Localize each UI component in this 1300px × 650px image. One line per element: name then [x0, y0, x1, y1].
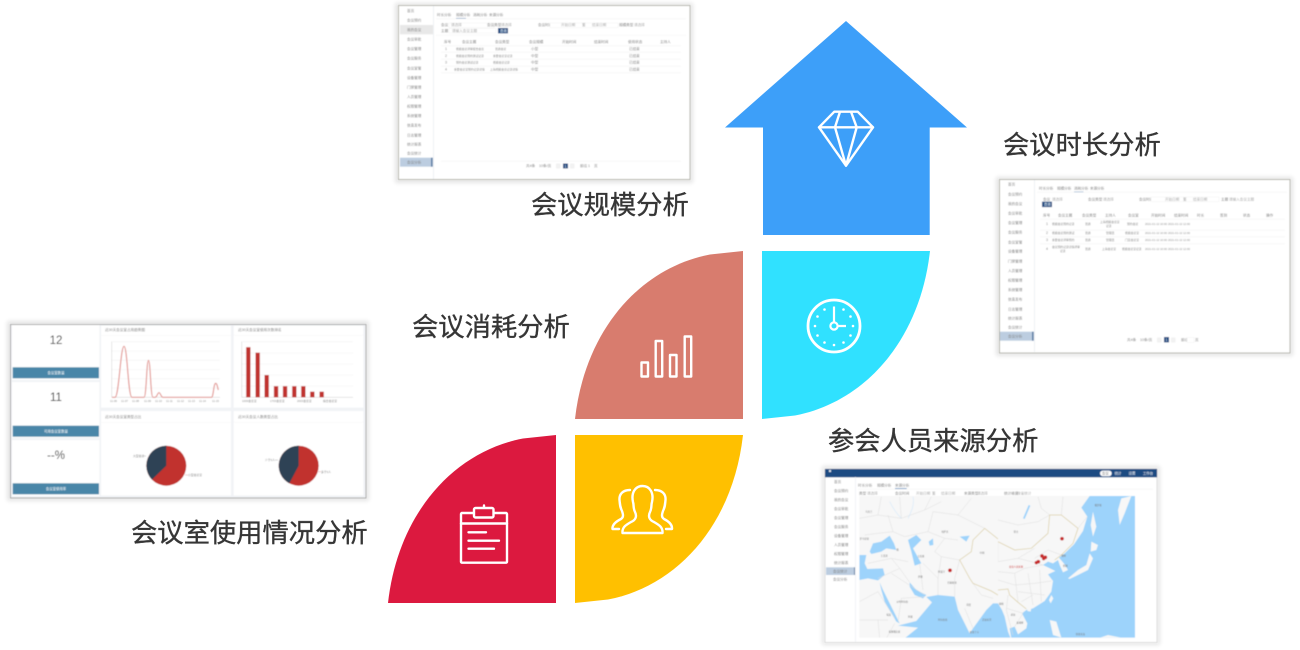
- sea areas west: [859, 535, 998, 638]
- data table: 中型: [531, 60, 539, 64]
- bar chart card: 综合会议室: [323, 399, 337, 403]
- tabs and filter: 按省统计: [1017, 491, 1032, 496]
- data table: 2021-01-12 12:00: [1168, 238, 1191, 242]
- filter bar: 会议类型: [487, 22, 502, 27]
- filter bar: 请输入会议主题: [452, 28, 478, 33]
- borders west: [877, 508, 959, 622]
- petal: consumption analysis: [575, 251, 743, 419]
- line chart card: 11-10: [155, 399, 162, 403]
- sidebar: 会议审批: [407, 36, 422, 41]
- data table: 序号: [1043, 212, 1051, 217]
- sidebar: 首页: [407, 8, 415, 13]
- islands east: [1027, 496, 1131, 638]
- bar chart card: 近30天会议室使用次数排名: [238, 327, 282, 332]
- bar chart card: 2003会议室: [297, 399, 312, 403]
- sidebar: 日志管理: [407, 132, 422, 137]
- icon: clock: [808, 300, 860, 352]
- data table: 2: [445, 54, 447, 58]
- tabs and filter: 开始日期: [916, 491, 931, 496]
- labels east: 俄罗斯: [1095, 503, 1102, 507]
- petal: attendee source analysis: [575, 435, 743, 603]
- pie chart card: attendee type: 少于5人: [265, 458, 275, 462]
- sidebar: 会议分析: [833, 576, 848, 581]
- sidebar: 会议预约: [407, 17, 422, 22]
- data table: 普通: [1085, 222, 1091, 226]
- data table: 视频会议预约记录: [1052, 222, 1075, 226]
- data table: 会议主题: [1058, 212, 1073, 217]
- sidebar: 我的会议: [834, 497, 849, 502]
- line chart card: 11-14: [199, 399, 206, 403]
- data table: 预约会议: [1127, 222, 1138, 226]
- stat card: used rooms: 11: [50, 392, 62, 404]
- tabs and filter: 统计维度: [1004, 491, 1019, 496]
- data table: 视频会议室: [1125, 231, 1139, 235]
- pagination: [441, 161, 681, 168]
- icon: bar chart: [642, 336, 691, 376]
- sidebar: 会议管理: [834, 515, 849, 520]
- tabs: 消耗分析: [1074, 185, 1089, 190]
- data table: 已结束: [629, 66, 640, 71]
- data table: 重要会议室预约记录详情: [454, 67, 485, 71]
- data table: 管理员: [1106, 238, 1115, 242]
- sidebar: 权限管理: [1008, 278, 1023, 283]
- data table: 序号: [444, 39, 452, 44]
- data table: 会议室: [1128, 212, 1139, 217]
- bar chart card: 1009会议室: [242, 399, 257, 403]
- sidebar: 统计报表: [407, 142, 422, 147]
- labels west: 土库曼: [917, 554, 925, 558]
- labels west: 伊朗: [918, 574, 923, 578]
- labels east: 朝鲜: [1061, 553, 1067, 557]
- tabs: 来源分析: [1090, 185, 1105, 190]
- sidebar: 会议统计: [833, 569, 848, 574]
- sea areas east: [998, 496, 1135, 638]
- stat card: usage rate: [12, 440, 100, 496]
- data table: 已结束: [629, 60, 640, 64]
- sidebar: 首页: [1008, 182, 1016, 187]
- tabs and filter: 会议时间: [895, 491, 910, 496]
- data table: 3: [445, 60, 447, 64]
- map: east half: [998, 495, 1135, 640]
- pagination: 页: [1195, 337, 1199, 342]
- data table: 视频会议预约测试: [1052, 231, 1075, 235]
- top navigation bar: 设置: [1129, 471, 1136, 476]
- sidebar: 设备管理: [407, 75, 422, 80]
- pagination: 前往: [580, 163, 588, 168]
- sidebar: 日志管理: [1008, 306, 1023, 311]
- pagination: 1: [1166, 338, 1168, 342]
- tabs and filter: 时长分析: [858, 482, 873, 488]
- data table: 视频会议记录: [493, 60, 510, 64]
- stat card: used rooms: [12, 382, 100, 438]
- line chart card: 11-06: [110, 399, 117, 403]
- data table: 上海会议室: [1102, 247, 1116, 251]
- sidebar: 首页: [834, 479, 842, 484]
- labels west: 斯里兰卡: [970, 630, 980, 634]
- filter bar: 请选择: [451, 22, 462, 27]
- sidebar: 会议服务: [407, 56, 422, 61]
- data table: 视频会议室记录: [1122, 247, 1142, 251]
- filter bar: 结束日期: [1193, 196, 1208, 201]
- sidebar: 权限管理: [407, 104, 422, 109]
- labels east: 老挝: [1011, 613, 1016, 617]
- filter bar: 查询: [500, 28, 507, 33]
- sidebar: 会议分析: [1008, 333, 1023, 338]
- sidebar: 人员管理: [407, 94, 422, 99]
- top navigation bar: 会议: [1102, 471, 1109, 476]
- filter bar: [1042, 196, 1255, 207]
- marker: Afghanistan: [948, 568, 952, 572]
- line chart card: 11-13: [188, 399, 195, 403]
- filter bar: 请选择: [1103, 196, 1114, 201]
- labels west: 土耳其: [881, 554, 888, 558]
- red data markers: [1035, 537, 1064, 564]
- sidebar: 会议预约: [834, 488, 849, 493]
- sidebar: 会议管理: [1008, 220, 1023, 225]
- labels west: 印度: [966, 603, 972, 607]
- arrow: blue up arrow: [725, 21, 967, 235]
- data table: 已结束: [629, 53, 640, 58]
- line chart card: 11-08: [132, 399, 139, 403]
- data table: 使用状态: [628, 39, 643, 44]
- data table: 4: [445, 67, 447, 71]
- tabs and filter: [858, 482, 1153, 496]
- heading: meeting duration analysis: 会议时长分析: [1003, 130, 1161, 160]
- tabs: 时长分析: [1039, 185, 1054, 190]
- data table: 时长: [1197, 212, 1205, 217]
- heading: attendee source analysis: 参会人员来源分析: [828, 426, 1038, 456]
- labels west: 沙特阿拉伯: [896, 599, 909, 603]
- data table: 2021-01-12 12:00: [1168, 222, 1191, 226]
- sidebar: 门禁管理: [1008, 258, 1023, 263]
- panel: meeting scale screenshot: [395, 3, 693, 183]
- pagination: 共4条: [526, 163, 536, 168]
- bar chart card: [234, 326, 363, 408]
- filter bar: 开始日期: [561, 22, 576, 27]
- stat card: used rooms: 可用会议室数量: [44, 428, 68, 434]
- labels east: 蒙古: [1014, 529, 1019, 533]
- labels west: 中国: [980, 550, 985, 554]
- pagination: [1127, 337, 1199, 342]
- top navigation bar: 统计: [1115, 471, 1122, 476]
- data table: 会议类型: [1082, 212, 1097, 217]
- data table: 签到: [1220, 212, 1228, 217]
- sidebar: 会议统计: [1008, 325, 1023, 330]
- data table: 会议类型: [495, 39, 510, 44]
- data table: 状态: [1243, 212, 1251, 217]
- panel: room usage dashboard screenshot: [7, 321, 369, 501]
- petal: duration analysis: [762, 251, 930, 419]
- sidebar: 会议服务: [1008, 230, 1023, 235]
- sidebar: 会议审批: [834, 506, 849, 511]
- data table: 门禁会议室: [1125, 238, 1139, 242]
- panel: attendee source map screenshot: [822, 466, 1160, 645]
- filter bar: 请选择: [1052, 196, 1063, 201]
- data table: 上海视频会议记录详情: [490, 67, 518, 71]
- line chart card: 近30天会议室占用趋势图: [105, 327, 145, 332]
- sidebar: 门禁管理: [407, 84, 422, 89]
- sidebar: [400, 6, 434, 179]
- pagination: 前往: [1181, 337, 1189, 342]
- labels west: [860, 510, 992, 634]
- sidebar: [826, 477, 856, 642]
- labels east: 菲律宾海: [1076, 632, 1086, 636]
- tabs and filter: 请选择: [867, 491, 878, 496]
- tabs: [436, 12, 686, 19]
- data table: 小型: [531, 46, 539, 51]
- top navigation bar: [825, 469, 1157, 477]
- map: west half: [858, 495, 998, 640]
- pagination: 1: [588, 164, 590, 168]
- data table: 2021-01-12 10:00: [1145, 238, 1168, 242]
- sidebar: 信息发布: [407, 123, 422, 128]
- filter bar: 主题: [441, 28, 449, 33]
- tabs and filter: 类型: [859, 491, 867, 496]
- stat card: total rooms: [12, 325, 100, 380]
- data table: 视频会议预约测试记录: [456, 54, 484, 58]
- labels west: 埃塞俄比亚: [889, 630, 901, 634]
- line chart card: 11-11: [166, 399, 173, 403]
- labels west: 乌克兰: [865, 510, 873, 514]
- data table: [441, 39, 681, 73]
- data table: 2021-01-12 12:00: [1168, 231, 1191, 235]
- sidebar: 会议分析: [407, 159, 422, 164]
- labels east: [999, 503, 1102, 636]
- data table: 2: [1046, 231, 1048, 235]
- icon: diamond: [819, 112, 873, 166]
- stat card: total rooms: 会议室数量: [48, 370, 65, 375]
- labels west: 俄: [896, 547, 899, 551]
- tabs and filter: 结束日期: [941, 491, 956, 496]
- pie chart card: meeting type: 近30天会议室类型占比: [105, 414, 142, 419]
- data table: 结束时间: [594, 39, 609, 44]
- sidebar: 设备管理: [1008, 249, 1023, 254]
- filter bar: 开始日期: [1165, 196, 1180, 201]
- sidebar: 统计报表: [1008, 315, 1023, 320]
- top navigation bar: 工作台: [1143, 471, 1154, 476]
- data table: 预约会议测试记录: [456, 60, 479, 64]
- sidebar: 设备管理: [834, 533, 849, 538]
- pagination: 10条/页: [539, 163, 552, 168]
- pie chart card: meeting type: [101, 411, 231, 496]
- data table: 中型: [531, 53, 539, 58]
- pagination: 共4条: [1127, 337, 1137, 342]
- data table: 1: [445, 47, 447, 51]
- data table: 主持人: [1105, 212, 1116, 217]
- tabs: 规模分析: [456, 12, 471, 17]
- data table: 记录: [1060, 249, 1066, 253]
- sidebar: 人员管理: [1008, 268, 1023, 273]
- stat card: usage rate: --%: [47, 450, 65, 462]
- sidebar: 会议室管: [407, 65, 422, 70]
- labels west: 阿拉伯海: [938, 617, 948, 621]
- pie chart card: attendee type: 多于5人: [321, 470, 331, 474]
- pie chart card: meeting type: 大型会议: [133, 454, 144, 458]
- labels east: 韩国: [1063, 564, 1068, 568]
- filter bar: 会议: [1043, 196, 1051, 201]
- data table: 结束时间: [1174, 212, 1189, 217]
- data table: [1040, 212, 1285, 253]
- tabs: 规模分析: [1057, 185, 1072, 190]
- sidebar: 会议审批: [1008, 211, 1023, 216]
- labels east: 柬埔寨: [1016, 620, 1024, 624]
- data table: 2021-01-12 10:00: [1145, 247, 1168, 251]
- tabs: 消耗分析: [473, 12, 488, 17]
- labels west: 阿富汗: [938, 569, 946, 573]
- data table: 开始时间: [562, 39, 577, 44]
- borders east: [1006, 558, 1042, 635]
- labels west: 巴基斯坦: [947, 580, 957, 584]
- sidebar: 系统管理: [1008, 287, 1023, 292]
- data table: 2021-01-12 12:00: [1168, 247, 1191, 251]
- data table: 记录: [1106, 224, 1112, 228]
- tabs: [1037, 185, 1287, 192]
- pie chart card: attendee type: [234, 411, 363, 496]
- line chart card: [101, 326, 231, 408]
- petal: room usage analysis: [388, 435, 556, 603]
- labels west: 罗马尼亚: [860, 536, 870, 540]
- data table: 已结束: [629, 46, 640, 51]
- tabs and filter: 至: [932, 492, 936, 496]
- line chart card: 11-15: [212, 399, 219, 403]
- China border east: [998, 515, 1078, 609]
- map data label: 会议人员来源: [1009, 565, 1024, 569]
- bar chart card: 1703会议室: [270, 399, 285, 403]
- filter bar: 请选择: [634, 22, 645, 27]
- pagination: 页: [594, 163, 598, 168]
- filter bar: 主题: [1221, 196, 1229, 201]
- tabs and filter: 来源类型: [964, 491, 979, 496]
- line chart card: 11-09: [144, 399, 151, 403]
- data table: 2021-01-12 10:00: [1145, 222, 1168, 226]
- filter bar: 请输入会议主题: [1229, 196, 1255, 201]
- sidebar: 会议室管: [1008, 239, 1023, 244]
- filter bar: 至: [1183, 197, 1187, 201]
- rivers: [890, 497, 913, 518]
- data table: 1: [1046, 222, 1048, 226]
- labels west: 阿曼: [908, 615, 913, 619]
- data table: 中型: [531, 66, 539, 71]
- filter bar: 会议: [441, 22, 449, 27]
- data table: 主持人: [660, 39, 671, 44]
- tabs and filter: 来源分析: [895, 482, 910, 488]
- filter bar: 规模类型: [619, 22, 634, 27]
- data table: 会议预约记录详情评审: [1052, 245, 1080, 249]
- data table: 重要会议室记录: [493, 54, 513, 58]
- sidebar: 会议统计: [407, 151, 422, 156]
- tabs: 来源分析: [489, 12, 504, 17]
- icon: people: [612, 486, 672, 533]
- tabs and filter: 规模分析: [877, 482, 892, 488]
- stat card: total rooms: 12: [50, 335, 62, 347]
- heading: meeting scale analysis: 会议规模分析: [531, 190, 689, 220]
- sidebar: 我的会议: [1008, 201, 1023, 206]
- pie chart card: meeting type: 小型会议室: [188, 473, 202, 477]
- China border west: [960, 528, 998, 595]
- data table: 管理员: [1106, 231, 1115, 235]
- filter bar: 会议时间: [538, 22, 553, 27]
- panel: meeting duration screenshot: [996, 177, 1293, 356]
- data table: 重要会议评审预约: [1052, 238, 1075, 242]
- labels west: 埃及: [886, 613, 892, 617]
- labels east: 缅甸: [999, 601, 1004, 605]
- data table: 上海视频会议室: [1100, 220, 1120, 224]
- sidebar: 人员管理: [834, 542, 849, 547]
- filter bar: 会议类型: [1088, 196, 1103, 201]
- line chart card: 11-07: [121, 399, 128, 403]
- data table: 会议规模: [529, 39, 544, 44]
- data table: 普通: [1085, 238, 1091, 242]
- sidebar: 会议预约: [1008, 191, 1023, 196]
- filter bar: [436, 22, 686, 35]
- heading: meeting consumption analysis: 会议消耗分析: [412, 312, 570, 342]
- data table: 3: [1046, 238, 1048, 242]
- pagination: 10条/页: [1140, 337, 1153, 342]
- labels west: 孟加拉湾: [982, 617, 992, 621]
- data table: 4: [1046, 247, 1048, 251]
- data table: 普通: [1085, 247, 1091, 251]
- heading: meeting room usage analysis: 会议室使用情况分析: [131, 518, 368, 548]
- data table: 会议主题: [462, 39, 477, 44]
- data table: 开始时间: [1151, 212, 1166, 217]
- sidebar: 会议服务: [834, 524, 849, 529]
- data table: 视频会议评审报告会议: [456, 47, 484, 51]
- sidebar: 我的会议: [407, 27, 422, 32]
- data table: 2021-01-12 10:00: [1145, 231, 1168, 235]
- filter bar: 至: [582, 23, 586, 27]
- tabs: 时长分析: [437, 12, 452, 17]
- filter bar: 请选择: [501, 22, 512, 27]
- icon: clipboard: [461, 506, 507, 563]
- data table: 操作: [1266, 212, 1274, 217]
- sidebar: 系统管理: [407, 113, 422, 118]
- data table: 普通: [1085, 231, 1091, 235]
- sidebar: 会议管理: [407, 46, 422, 51]
- stat card: usage rate: 会议室使用率: [46, 486, 67, 491]
- sidebar: [1000, 180, 1035, 352]
- line chart card: 11-12: [177, 399, 184, 403]
- tabs and filter: 请选择: [977, 491, 988, 496]
- filter bar: 会议时间: [1139, 196, 1154, 201]
- sidebar: 信息发布: [1008, 297, 1023, 302]
- pagination: 1: [564, 164, 566, 168]
- pie chart card: attendee type: 近30天会议人数类型占比: [238, 414, 278, 419]
- filter bar: 结束日期: [592, 22, 607, 27]
- sidebar: 统计报表: [834, 560, 849, 565]
- labels west: 哈萨克: [941, 529, 949, 533]
- filter bar: 查询: [1044, 202, 1051, 207]
- data table: 普通会议: [495, 47, 506, 51]
- sidebar: 权限管理: [834, 551, 849, 556]
